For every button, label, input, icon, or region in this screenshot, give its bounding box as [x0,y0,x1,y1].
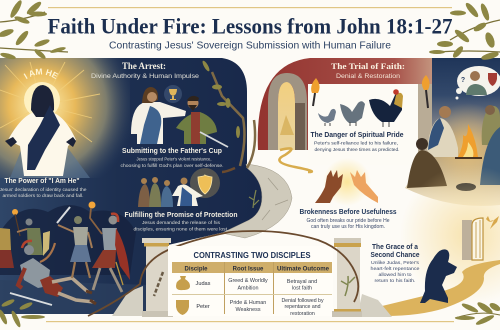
illustration: campfire scene: ? [461,77,465,84]
text block: brokenness before usefulness [300,209,397,230]
row: Judas: Greed & Worldly [228,278,268,284]
text block: brokenness before usefulness: God often breaks our pride before He [306,218,390,224]
text block: grace of a second chance: allowed him to [378,272,412,278]
illustration: soldiers [0,202,130,305]
table: contrasting two disciples [168,246,333,317]
icon: shield [198,175,212,194]
icon: olive branch top left [0,0,68,60]
text block: brokenness before usefulness: Brokenness Before Usefulness [300,209,397,216]
icon: olive branch bottom right [455,300,500,326]
text block: grace of a second chance: Second Chance [370,252,420,259]
text block: brokenness before usefulness: can truly use us for His kingdom. [311,224,385,230]
row: Peter: Peter [196,304,210,310]
row: Judas: Judas [196,281,211,287]
soldier: right with torch [88,202,130,292]
text block: grace of a second chance: return to his faith. [374,278,416,284]
table header row: Disciple [184,266,208,272]
illustration: pillar right [230,231,392,317]
icon: chalice bubble [164,85,182,103]
text block: fulfilling the promise: disciples, ensuring none of them were lost. [134,226,228,232]
illustration: Jesus and Peter [131,85,228,147]
row: Judas [176,276,317,292]
icon: torches [311,75,430,108]
illustration: stone arch [268,73,312,172]
text block: danger of spiritual pride: Peter's self-reliance led to his failure, [314,140,398,146]
text block: submitting to the father's cup [120,148,224,169]
text block: fulfilling the promise [124,212,238,232]
row: Peter: repentance and [284,304,321,310]
heading: the arrest: The Arrest: [122,61,166,71]
text block: submitting to the father's cup: choosing to fulfill God's plan over self-defense. [120,163,224,169]
soldier: fallen [10,241,96,305]
heading: trial of faith: The Trial of Faith: [331,61,405,71]
illustration: campfire scene [407,66,500,191]
text block: fulfilling the promise: Jesus demanded the release of his [142,220,221,226]
icon: Jesus silhouette with halo [5,82,76,176]
text block: power of I am he: The Power of "I Am He" [4,178,80,185]
row: Judas: Betrayal and [287,279,317,285]
table header row: Ultimate Outcome [277,266,330,272]
table header row: Root Issue [233,266,264,272]
row: Judas: Ambition [238,286,258,292]
soldier: left [0,209,20,268]
illustration: broken and restoring hands [315,158,378,206]
text block: power of I am he [0,178,87,199]
rule: bottom [46,321,454,322]
illustration: pillar left [88,232,230,317]
text: I AM HE: I AM HE [24,68,58,79]
text block: power of I am he: Jesus' declaration of identity caused the [0,187,87,193]
text block: submitting to the father's cup: Jesus stopped Peter's violent resistance, [136,156,212,162]
table title: CONTRASTING TWO DISCIPLES [194,251,311,260]
row: Judas: lost faith [292,286,312,292]
row: Peter: restoration [290,311,315,317]
panel: fire scene [405,58,500,206]
subtitle: Contrasting Jesus' Sovereign Submission with Human Failure [109,40,391,52]
table header row [172,262,332,314]
text block: fulfilling the promise: Fulfilling the Promise of Protection [124,212,238,219]
panel: trial of faith [258,58,440,165]
illustration: roosters [318,89,403,127]
row: Peter: Weakness [235,307,261,313]
soldier: olive with shield [17,218,50,256]
text block: grace of a second chance: Unlike Judas, Peter's [371,260,420,266]
row: Peter: Pride & Human [230,300,266,306]
illustration: gate and dove [400,165,500,305]
illustration: golden path with kneeling figure [378,249,500,316]
illustration: stone well and vines [222,164,292,238]
text block: grace of a second chance: The Grace of a [372,244,418,251]
illustration: disciples protected [138,168,220,207]
illustration: tree [201,60,267,172]
icon: dove [486,216,499,229]
panel: the arrest [0,58,262,314]
text block: danger of spiritual pride: denying Jesus three times as predicted. [314,147,400,153]
soldier: standing with sword [57,207,92,278]
text block: danger of spiritual pride: The Danger of Spiritual Pride [310,132,404,139]
icon: olive branch top right [429,1,500,61]
text block: submitting to the father's cup: Submitting to the Father's Cup [122,148,222,155]
text block: grace of a second chance: heart-felt repentance [370,266,420,272]
text block: power of I am he: armed soldiers to draw back and fall. [2,193,83,199]
icon: olive leaves bottom left [0,298,45,328]
top rule [48,7,452,8]
subheading: trial: Denial & Restoration [336,74,400,80]
illustration: shadow soldiers [0,205,136,275]
row: Peter [176,298,324,317]
text block: grace of a second chance [370,244,420,284]
row: Peter: Denial followed by [281,298,324,304]
subheading: arrest: Divine Authority & Human Impulse [91,73,200,80]
text block: danger of spiritual pride [310,132,404,153]
title: Faith Under Fire: Lessons from John 18:1-27 [48,14,452,38]
